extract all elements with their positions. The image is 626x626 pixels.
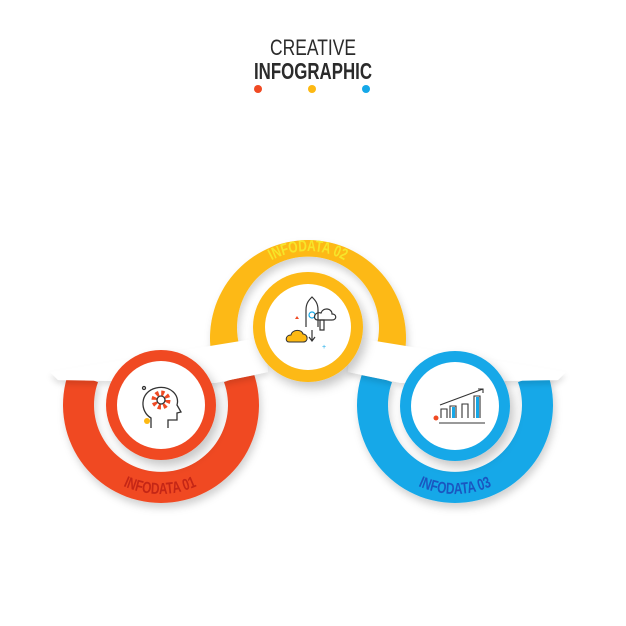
ring: infodata 03: INFODATA 03: [418, 476, 491, 494]
connector band left: [50, 337, 268, 383]
circle 02 with icon: [253, 272, 363, 382]
icon: bar chart growth: [439, 389, 485, 423]
ring: infodata 02: [208, 240, 412, 346]
title: CREATIVE: [270, 35, 356, 60]
ring: infodata 02: INFODATA 02: [267, 240, 348, 260]
ring: infodata 03: [356, 375, 558, 512]
circle 02 with icon: +: [322, 344, 326, 351]
ring: infodata 01: [62, 375, 264, 512]
icon: head with gear: [142, 386, 181, 428]
icon: rocket and clouds: [306, 297, 336, 341]
circle 03 with icon: [400, 351, 510, 461]
title: [254, 35, 372, 84]
connector band right: [348, 337, 566, 383]
title: INFOGRAPHIC: [254, 58, 372, 84]
circle 01 with icon: [106, 350, 216, 460]
ring: infodata 01: INFODATA 01: [124, 476, 196, 494]
title dots: [254, 85, 370, 93]
